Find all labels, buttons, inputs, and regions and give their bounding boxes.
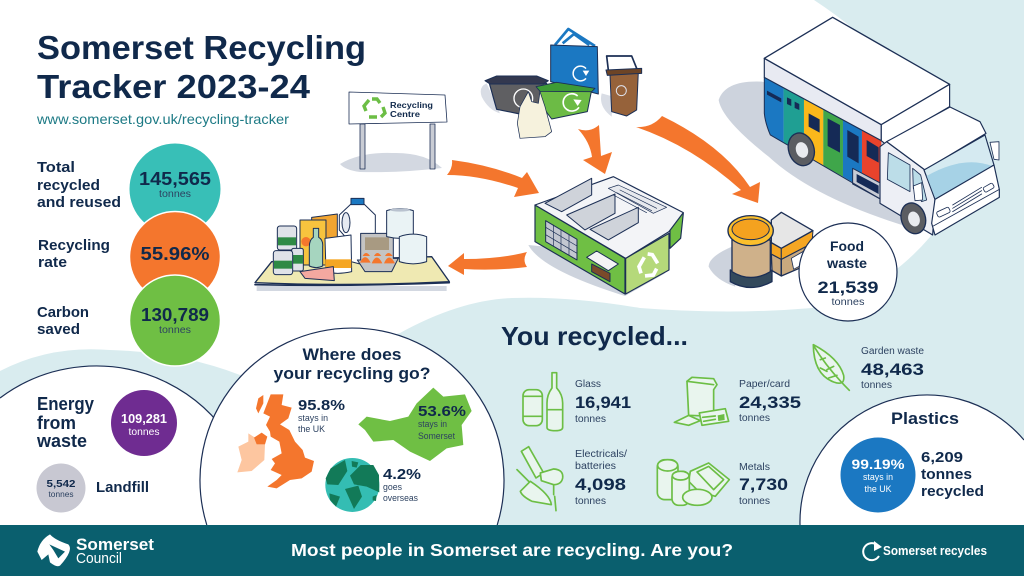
stat: stays in Somerset: Somerset: [418, 431, 455, 441]
panel: plastics: [800, 395, 1024, 525]
stat: stays in the UK: [298, 397, 345, 434]
item: glass: tonnes: [575, 413, 606, 425]
stat: goes overseas: 4.2%: [383, 466, 421, 483]
panel: plastics: tonnes: [921, 466, 972, 483]
panel: energy from waste and landfill: [0, 366, 256, 525]
illustration: recycling centre sign: Recycling: [390, 101, 433, 110]
pink tube: [300, 267, 334, 281]
item: garden waste: [813, 345, 924, 391]
item: electricals and batteries: Electricals/: [575, 449, 627, 460]
logo: Somerset Council: Somerset: [76, 535, 154, 554]
stat labels: total, rate, carbon: Carbon: [37, 304, 89, 321]
stat circle: recycling rate: [130, 212, 220, 302]
stat: stays in the UK: stays in: [298, 413, 328, 423]
panel: plastics: 99.19%: [852, 456, 905, 472]
item: metals: [657, 460, 788, 507]
stat circle: recycling rate: 55.96%: [140, 243, 210, 264]
heading: you recycled: You recycled...: [501, 321, 688, 351]
panel: where does your recycling go: [200, 328, 504, 525]
stat labels: total, rate, carbon: recycled: [37, 177, 100, 194]
item: metals: Metals: [739, 462, 770, 473]
logo: Somerset recycles: [863, 541, 987, 560]
soap bottle: [309, 228, 323, 268]
illustration: food waste plant: [709, 212, 813, 287]
icon: battery, hairdryer and iron: [517, 447, 563, 511]
panel: energy from waste and landfill: tonnes: [48, 490, 74, 499]
toilet rolls: [387, 208, 427, 264]
stat: goes overseas: [383, 466, 421, 503]
illustration: kerbside bins and bags: [481, 29, 642, 138]
stat: stays in the UK: the UK: [298, 424, 325, 434]
panel: plastics: the UK: [864, 484, 892, 494]
map: UK and Ireland: [237, 394, 314, 488]
panel: energy from waste and landfill: Landfill: [96, 479, 149, 496]
panel: plastics: Plastics: [891, 409, 959, 428]
stat labels: total, rate, carbon: Total: [37, 159, 75, 176]
blue bag: [551, 29, 598, 94]
stat labels: total, rate, carbon: saved: [37, 321, 80, 338]
panel: energy from waste and landfill: 5,542: [46, 479, 76, 490]
item: metals: 7,730: [739, 475, 788, 494]
item: garden waste: Garden waste: [861, 346, 924, 357]
arrow: sign to recycling centre: [447, 160, 539, 197]
stat: stays in Somerset: 53.6%: [418, 403, 466, 420]
icon: jar and bottle: [523, 373, 563, 431]
cans: [273, 226, 303, 275]
title: Tracker 2023-24: [37, 68, 311, 105]
logo: Somerset Council: [37, 534, 154, 567]
panel: food waste: waste: [826, 256, 868, 271]
icon: leaf: [813, 345, 849, 390]
white carrier bag: [517, 92, 552, 138]
website link: www.somerset.gov.uk/recycling-tracker: [36, 111, 289, 127]
arrow: recycling centre to products: [448, 252, 527, 275]
milk bottle: [339, 198, 375, 264]
egg box: [357, 233, 398, 272]
arrow: bins to food waste plant: [636, 116, 760, 203]
stat labels: total, rate, carbon: [37, 159, 121, 338]
item: garden waste: tonnes: [861, 379, 892, 391]
arrow: bins to recycling centre: [578, 125, 612, 174]
front wheel: [897, 200, 930, 237]
logo: Somerset recycles: Somerset recycles: [883, 543, 987, 558]
grey box: [485, 76, 548, 114]
panel: energy from waste and landfill: waste: [36, 431, 87, 451]
panel: plastics: 6,209: [921, 449, 963, 466]
panel: where does your recycling go: your recycling go?: [274, 364, 430, 383]
logo: Somerset Council: Council: [76, 550, 122, 567]
stat: stays in the UK: 95.8%: [298, 397, 345, 414]
panel: where does your recycling go: Where does: [302, 345, 402, 364]
stat circle: total recycled: 145,565: [139, 169, 211, 189]
item: paper and card: [674, 377, 801, 425]
stat labels: total, rate, carbon: and reused: [37, 194, 121, 211]
item: glass: Glass: [575, 379, 601, 390]
stat: goes overseas: overseas: [383, 493, 418, 503]
item: paper and card: tonnes: [739, 412, 770, 424]
illustration: recycling centre building: [528, 177, 683, 296]
icon: box and newspaper: [674, 377, 729, 425]
item: glass: 16,941: [575, 393, 631, 412]
icon: recycling symbol: [364, 99, 385, 117]
illustration: recycling centre sign: Centre: [390, 110, 421, 119]
item: garden waste: 48,463: [861, 360, 924, 379]
title: [37, 29, 366, 105]
panel: energy from waste and landfill: 109,281: [121, 412, 167, 426]
stat labels: total, rate, carbon: Recycling: [38, 237, 110, 254]
icon: globe: [325, 458, 379, 512]
panel: plastics: recycled: [921, 483, 984, 500]
stat circle: carbon saved: tonnes: [159, 324, 191, 336]
footer message: Most people in Somerset are recycling. Are you?: [291, 540, 733, 560]
panel: food waste: tonnes: [832, 296, 864, 308]
panel: energy from waste and landfill: tonnes: [128, 426, 160, 438]
item: electricals and batteries: 4,098: [575, 475, 626, 494]
panel: food waste: 21,539: [818, 278, 878, 297]
green box: [536, 82, 595, 119]
panel: energy from waste and landfill: from: [37, 413, 76, 433]
stat circle: total recycled: [130, 144, 220, 234]
item: glass: [523, 373, 631, 431]
illustration: recycled products on a table: [255, 198, 449, 291]
truck body: [719, 17, 950, 225]
illustration: recycling centre sign: [340, 92, 447, 172]
stat: stays in Somerset: [418, 403, 466, 441]
stat circle: total recycled: tonnes: [159, 188, 191, 200]
item: paper and card: 24,335: [739, 393, 801, 412]
truck cab: [880, 107, 999, 237]
item: paper and card: Paper/card: [739, 379, 790, 390]
brown caddy: [606, 56, 642, 116]
orange cartons: [300, 214, 337, 265]
item: electricals and batteries: tonnes: [575, 495, 606, 507]
panel: food waste: Food: [830, 239, 864, 254]
item: metals: tonnes: [739, 495, 770, 507]
item: electricals and batteries: batteries: [575, 461, 616, 472]
item: electricals and batteries: [517, 447, 627, 511]
stat: stays in Somerset: stays in: [418, 419, 447, 429]
map: Somerset: [358, 388, 472, 461]
stat circle: carbon saved: 130,789: [141, 305, 209, 325]
panel: plastics: stays in: [863, 472, 893, 482]
stat labels: total, rate, carbon: rate: [38, 254, 67, 271]
panel: energy from waste and landfill: Energy: [37, 394, 94, 414]
flour bag: [325, 235, 352, 273]
title: Somerset Recycling: [37, 29, 366, 66]
illustration: recycling truck: [719, 17, 999, 237]
stat: goes overseas: goes: [383, 482, 402, 492]
icon: cans and trays: [657, 460, 729, 505]
stat circle: carbon saved: [130, 275, 220, 366]
footer band: [0, 525, 1024, 576]
panel: food waste: [799, 223, 897, 321]
